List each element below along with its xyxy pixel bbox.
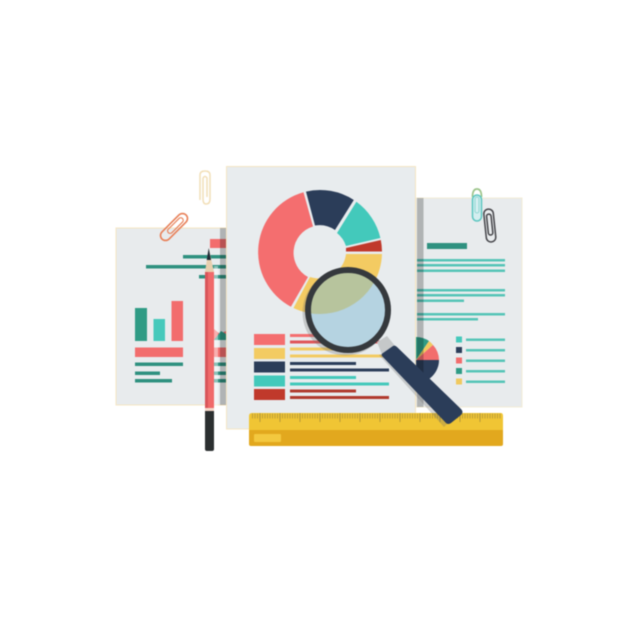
donut segment: dark red [346, 240, 382, 252]
panel: left document [116, 228, 228, 405]
heading bar: left document [210, 239, 226, 248]
table legend [254, 334, 389, 400]
bar chart [135, 301, 183, 341]
donut segment: red [258, 192, 313, 307]
magnifier connector [377, 336, 396, 357]
lens [304, 266, 392, 354]
right part of lower chart [214, 329, 226, 340]
pencil end [205, 411, 214, 451]
donut chart [258, 190, 382, 314]
text lines: left document bottom [135, 362, 226, 382]
paper clip: beige [200, 171, 210, 204]
text lines: left document top [146, 255, 226, 278]
pencil [205, 248, 218, 451]
donut segment: navy [306, 190, 354, 230]
legend: right document [456, 336, 505, 384]
pie chart: right document [416, 337, 439, 383]
pencil tip [205, 248, 214, 272]
paper clip: dark [483, 209, 496, 242]
heading bar: right document [427, 243, 467, 249]
pencil body [205, 272, 214, 408]
panel: centre document [226, 166, 416, 429]
magnifying glass [302, 266, 464, 427]
paper clip: green [472, 189, 482, 221]
pencil shadow [214, 266, 218, 410]
red caption bar, right part [214, 348, 226, 357]
magnifier handle [382, 346, 462, 424]
ruler [249, 413, 503, 446]
illustration: analysis documents [115, 166, 523, 452]
red caption bar [135, 348, 183, 357]
donut segment: teal [337, 202, 380, 246]
panel: right document [416, 198, 522, 407]
magnifier shadow [302, 270, 452, 427]
text lines: right document [417, 259, 505, 320]
paper clip: orange [158, 211, 190, 243]
donut segment: yellow [294, 254, 382, 314]
